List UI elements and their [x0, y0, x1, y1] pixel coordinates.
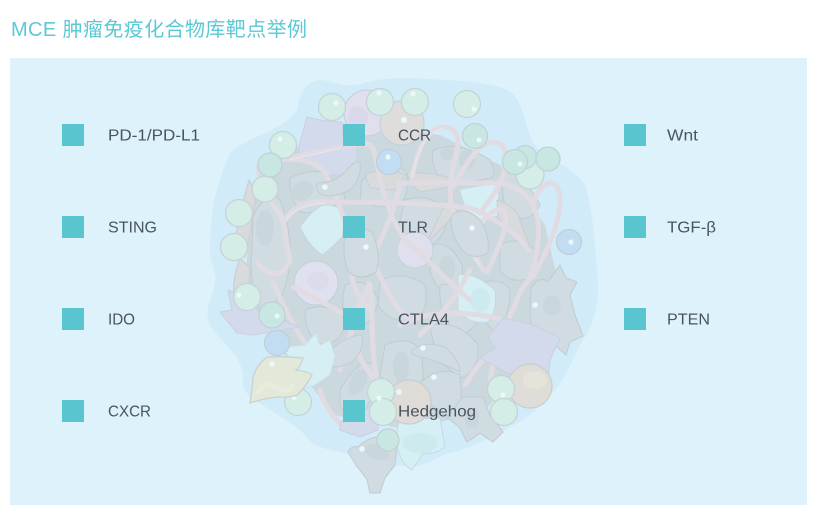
target label: Hedgehog: Hedgehog	[398, 404, 476, 420]
cell: lavender top	[344, 90, 390, 136]
target marker: CTLA4	[343, 308, 365, 330]
target marker: PTEN	[624, 308, 646, 330]
target marker: IDO	[62, 308, 84, 330]
cell: grey centre bean	[344, 229, 378, 277]
cell: grey lower bean	[325, 335, 363, 367]
cell: light blue	[300, 205, 344, 255]
balls: teal	[258, 124, 560, 451]
cell: lavender center	[397, 232, 433, 268]
target marker: Wnt	[624, 124, 646, 146]
target marker: STING	[62, 216, 84, 238]
cell: yellow	[250, 357, 312, 403]
ball: light green lower left	[284, 388, 312, 416]
target label: PTEN: PTEN	[667, 312, 710, 328]
target label: Wnt: Wnt	[667, 128, 699, 144]
spindle cells tan	[234, 170, 530, 300]
cell: grey bottom right	[447, 397, 503, 442]
ball: tan lower centre	[387, 380, 431, 424]
halo behind tumor	[208, 78, 598, 467]
illustration: tumor microenvironment	[208, 78, 598, 493]
target marker: Hedgehog	[343, 400, 365, 422]
target marker: PD-1/PD-L1	[62, 124, 84, 146]
cell: cyan bottom	[396, 418, 445, 470]
cell: grey rounded lower	[420, 371, 461, 420]
cell: lavender bottom	[340, 405, 378, 437]
target label: TLR: TLR	[398, 220, 428, 236]
title: MCE 肿瘤免疫化合物库靶点举例	[11, 18, 307, 41]
cells: grey layer	[251, 147, 540, 414]
balls: blue	[264, 150, 582, 356]
target label: CCR: CCR	[398, 128, 431, 144]
target label: STING: STING	[108, 220, 157, 236]
cell: tan top	[380, 101, 424, 145]
pink tangled fibres	[258, 127, 560, 432]
target marker: CXCR	[62, 400, 84, 422]
cell: lavender star right	[480, 318, 560, 380]
cell: cyan star	[283, 333, 335, 390]
target label: IDO: IDO	[108, 312, 135, 328]
target marker: TGF-β	[624, 216, 646, 238]
cell: grey lobed	[412, 344, 460, 372]
cell: grey bottom star	[348, 437, 397, 493]
cell: cyan upper right	[460, 183, 498, 222]
target marker: TLR	[343, 216, 365, 238]
dark cell mass	[245, 122, 560, 430]
cell: purple round	[294, 261, 338, 305]
target marker: CCR	[343, 124, 365, 146]
cell: cyan right	[458, 275, 496, 322]
cell: grey centre right	[451, 211, 488, 256]
target label: TGF-β: TGF-β	[667, 220, 716, 236]
balls: light green	[220, 88, 544, 426]
ball: tan lower right	[508, 364, 552, 408]
cell: lavender star left	[220, 290, 300, 335]
cell: grey bean upper left	[317, 162, 360, 196]
cell: lavender star	[298, 117, 357, 175]
target label: CXCR: CXCR	[108, 404, 151, 420]
target label: CTLA4: CTLA4	[398, 312, 449, 328]
cell: grey star right	[530, 265, 583, 355]
target label: PD-1/PD-L1: PD-1/PD-L1	[108, 128, 200, 144]
